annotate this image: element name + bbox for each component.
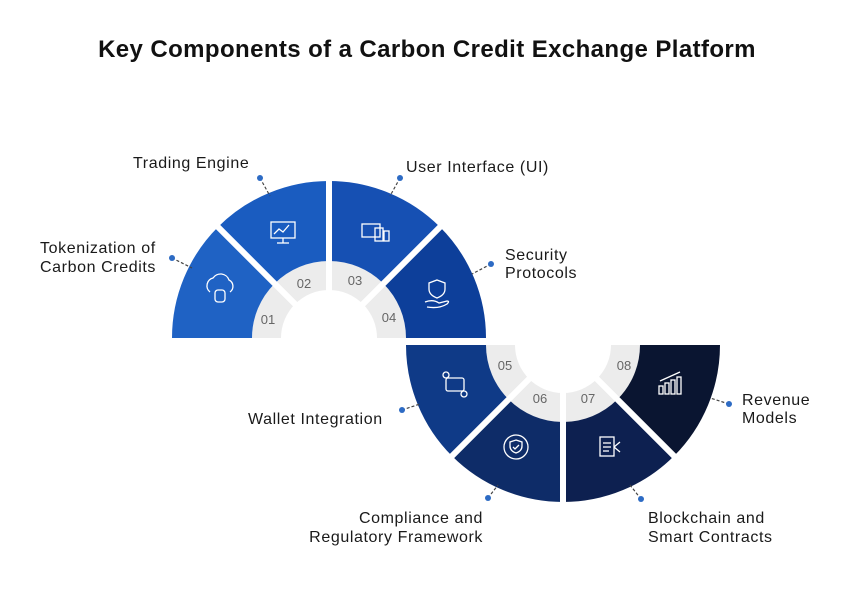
labels: Protocols bbox=[505, 265, 577, 282]
icon: contract bbox=[600, 437, 620, 456]
icon: wallet bbox=[443, 372, 467, 397]
numbers: 07 bbox=[581, 391, 595, 406]
title: Key Components of a Carbon Credit Exchange Platform bbox=[98, 36, 756, 63]
icons bbox=[207, 222, 681, 459]
labels: Security bbox=[505, 247, 568, 264]
chart: top semicircle bbox=[172, 175, 486, 338]
icon: trading monitor bbox=[271, 222, 295, 243]
numbers: 05 bbox=[498, 358, 512, 373]
labels: Tokenization of bbox=[40, 240, 156, 257]
icon: growth chart bbox=[659, 372, 681, 394]
icon: devices bbox=[362, 224, 389, 241]
icon: shield cycle bbox=[504, 435, 528, 459]
labels: Blockchain and bbox=[648, 510, 765, 527]
chart: bottom semicircle bbox=[406, 345, 720, 508]
labels: Trading Engine bbox=[133, 155, 249, 172]
icon: shield hand bbox=[425, 280, 448, 308]
numbers: 06 bbox=[533, 391, 547, 406]
labels bbox=[40, 155, 810, 546]
connectors bbox=[169, 175, 732, 502]
numbers: 04 bbox=[382, 310, 396, 325]
numbers: 02 bbox=[297, 276, 311, 291]
numbers: 01 bbox=[261, 312, 275, 327]
numbers bbox=[261, 273, 631, 406]
labels: Regulatory Framework bbox=[309, 529, 483, 546]
numbers: 08 bbox=[617, 358, 631, 373]
labels: Compliance and bbox=[359, 510, 483, 527]
labels: Revenue bbox=[742, 392, 810, 409]
labels: Models bbox=[742, 410, 797, 427]
icon: cloud database bbox=[207, 274, 233, 302]
numbers: 03 bbox=[348, 273, 362, 288]
labels: User Interface (UI) bbox=[406, 159, 549, 176]
labels: Wallet Integration bbox=[248, 411, 383, 428]
labels: Carbon Credits bbox=[40, 259, 156, 276]
labels: Smart Contracts bbox=[648, 529, 773, 546]
